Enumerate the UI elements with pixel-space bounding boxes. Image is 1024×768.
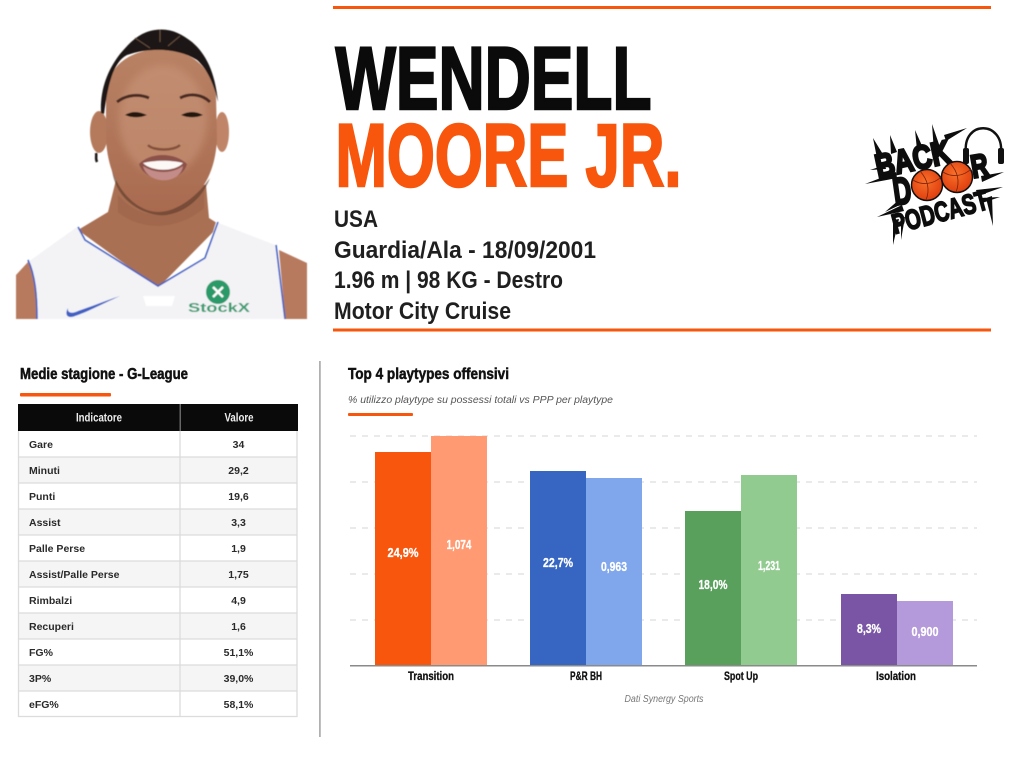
- table values: 39,0%: [224, 673, 254, 685]
- table labels: FG%: [29, 647, 54, 659]
- hair: [101, 30, 218, 114]
- table values: 34: [233, 439, 244, 451]
- group: Transition: 1,074: [446, 537, 472, 552]
- player name: WENDELL: [336, 28, 652, 128]
- table labels: Assist/Palle Perse: [29, 569, 120, 581]
- panel divider: [319, 361, 321, 737]
- group: Isolation: [841, 594, 953, 683]
- logo streaks: [865, 124, 1004, 245]
- brows and eyes: [117, 95, 210, 102]
- logo lettering: R: [968, 146, 991, 185]
- group: Isolation: 8,3%: [857, 621, 881, 636]
- chart grid lines: [350, 436, 977, 620]
- data source note: Dati Synergy Sports: [624, 693, 704, 705]
- group: Transition: 24,9%: [388, 545, 419, 560]
- group: Spot Up: Spot Up: [724, 669, 758, 683]
- player portrait: [16, 30, 307, 319]
- table header: [18, 404, 298, 431]
- table values: 3,3: [231, 517, 246, 529]
- table labels: 3P%: [29, 673, 52, 685]
- nike logo: [66, 296, 120, 317]
- bar chart: [350, 436, 977, 683]
- table labels: [29, 439, 120, 711]
- table grid lines: [18, 431, 297, 716]
- table header: Valore: [224, 412, 254, 424]
- stockx logo: StockX: [188, 300, 250, 315]
- table labels: eFG%: [29, 699, 59, 711]
- table values: 29,2: [228, 465, 249, 477]
- group: Spot Up: 18,0%: [698, 577, 728, 592]
- jersey: [28, 222, 285, 319]
- face: [106, 49, 217, 212]
- group: P&R BH: [530, 471, 642, 683]
- group: P&R BH: P&R BH: [570, 669, 602, 683]
- stats table: [18, 404, 298, 716]
- jersey trim: [28, 222, 285, 319]
- player name: [336, 28, 682, 205]
- player info: 1.96 m | 98 KG - Destro: [334, 267, 563, 294]
- group: Transition: [375, 436, 487, 683]
- arms: [16, 250, 307, 319]
- table values: 19,6: [228, 491, 249, 503]
- neck: [78, 180, 220, 288]
- table values: 4,9: [231, 595, 246, 607]
- table labels: Recuperi: [29, 621, 74, 633]
- table labels: Assist: [29, 517, 61, 529]
- player name: MOORE JR.: [336, 105, 682, 205]
- heading underline: [20, 393, 111, 396]
- logo basketballs: [912, 162, 972, 200]
- group: P&R BH: 22,7%: [543, 555, 573, 570]
- mouth: [139, 155, 187, 179]
- nose: [148, 145, 180, 150]
- player info: [334, 206, 596, 325]
- bottom rule: [333, 328, 991, 332]
- stockx logo: [188, 280, 250, 315]
- player info: Motor City Cruise: [334, 298, 511, 325]
- table row stripes: [18, 457, 297, 691]
- heading: season averages: Medie stagione - G-League: [20, 366, 188, 383]
- logo: Back Door Podcast: [865, 124, 1004, 245]
- table values: 1,75: [228, 569, 249, 581]
- table values: 58,1%: [224, 699, 254, 711]
- logo lettering: [872, 133, 991, 240]
- table labels: Punti: [29, 491, 55, 503]
- logo lettering: BACK: [872, 133, 954, 185]
- chart axis: [350, 665, 977, 666]
- player info: Guardia/Ala - 18/09/2001: [334, 237, 596, 264]
- ears: [90, 111, 108, 153]
- table header: Indicatore: [76, 412, 122, 424]
- chart subtitle: % utilizzo playtype su possessi totali vs PPP per playtype: [348, 394, 613, 406]
- table values: 1,6: [231, 621, 246, 633]
- group: P&R BH: 0,963: [601, 559, 627, 574]
- table values: [224, 439, 254, 711]
- table labels: Minuti: [29, 465, 60, 477]
- group: Spot Up: [685, 475, 797, 683]
- table values: 51,1%: [224, 647, 254, 659]
- top rule: [333, 6, 991, 9]
- subtitle underline: [348, 413, 413, 416]
- table labels: Gare: [29, 439, 53, 451]
- player info: USA: [334, 206, 378, 233]
- beard shadow: [112, 170, 210, 215]
- table values: 1,9: [231, 543, 246, 555]
- table labels: Palle Perse: [29, 543, 85, 555]
- table labels: Rimbalzi: [29, 595, 72, 607]
- group: Isolation: 0,900: [912, 624, 938, 639]
- group: Isolation: Isolation: [876, 669, 916, 683]
- heading: top playtypes: Top 4 playtypes offensivi: [348, 366, 509, 383]
- group: Transition: Transition: [408, 669, 454, 683]
- logo headphones: [963, 128, 1004, 164]
- logo lettering: D: [890, 170, 914, 214]
- group: Spot Up: 1,231: [758, 558, 780, 573]
